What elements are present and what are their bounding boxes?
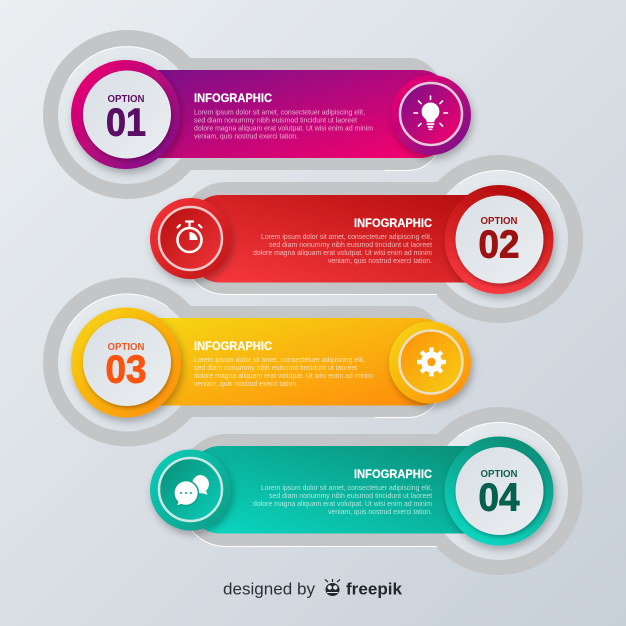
body text: sed diam nonummy nibh euismod tincidunt ut laoreet xyxy=(269,240,432,249)
body text: veniam, quis nostrud exerci tation. xyxy=(328,256,432,265)
body text: Lorem ipsum dolor sit amet, consectetuer adipiscing elit, xyxy=(261,483,432,492)
panel: option 02 xyxy=(150,155,583,323)
option badge xyxy=(444,185,554,294)
icon: light bulb xyxy=(391,75,471,155)
body text: dolore magna aliquam erat volutpat. Ut wisi enim ad minim xyxy=(194,371,373,380)
body text xyxy=(194,355,373,388)
option badge xyxy=(71,308,181,418)
heading: INFOGRAPHIC xyxy=(194,93,272,105)
body text xyxy=(253,232,432,265)
body text: dolore magna aliquam erat volutpat. Ut wisi enim ad minim xyxy=(253,499,432,508)
body text: dolore magna aliquam erat volutpat. Ut wisi enim ad minim xyxy=(194,123,373,132)
panel: option 04 xyxy=(150,407,583,575)
option badge: 02 xyxy=(478,224,520,266)
option badge: OPTION xyxy=(480,468,518,480)
heading: INFOGRAPHIC xyxy=(354,218,432,230)
body text: veniam, quis nostrud exerci tation. xyxy=(194,131,298,140)
body text: sed diam nonummy nibh euismod tincidunt ut laoreet xyxy=(194,363,357,372)
body text: Lorem ipsum dolor sit amet, consectetuer adipiscing elit, xyxy=(194,355,365,364)
icon: gear xyxy=(389,322,471,404)
body text: veniam, quis nostrud exerci tation. xyxy=(328,507,432,516)
body text: Lorem ipsum dolor sit amet, consectetuer adipiscing elit, xyxy=(194,107,365,116)
credit text: designed by xyxy=(223,580,316,598)
brand name: freepik xyxy=(346,580,403,598)
option badge: 03 xyxy=(106,349,146,392)
heading: INFOGRAPHIC xyxy=(354,469,432,481)
grey backing shape xyxy=(190,407,583,575)
body text: veniam, quis nostrud exerci tation. xyxy=(194,379,298,388)
icon: freepik bee xyxy=(325,579,340,596)
option badge: 04 xyxy=(478,477,520,520)
panel: option 01 xyxy=(43,30,471,199)
grey backing shape xyxy=(43,278,438,446)
option badge xyxy=(444,436,554,546)
body text: sed diam nonummy nibh euismod tincidunt ut laoreet xyxy=(269,491,432,500)
icon: chat bubbles xyxy=(150,450,231,530)
option badge: 01 xyxy=(106,102,146,144)
colour bar xyxy=(130,318,450,406)
option badge: OPTION xyxy=(480,215,518,227)
grey backing shape xyxy=(190,155,583,323)
grey backing shape xyxy=(43,30,438,199)
panel: option 03 xyxy=(43,278,471,446)
option badge: OPTION xyxy=(108,341,144,353)
body text xyxy=(194,107,373,140)
body text: dolore magna aliquam erat volutpat. Ut wisi enim ad minim xyxy=(253,248,432,257)
option badge xyxy=(71,60,180,169)
icon: stopwatch xyxy=(150,198,231,279)
colour bar xyxy=(190,195,500,282)
body text: sed diam nonummy nibh euismod tincidunt ut laoreet xyxy=(194,115,357,124)
footer: freepik credit xyxy=(223,579,403,598)
colour bar xyxy=(190,446,500,534)
body text: Lorem ipsum dolor sit amet, consectetuer adipiscing elit, xyxy=(261,232,432,241)
heading: INFOGRAPHIC xyxy=(194,341,272,353)
body text xyxy=(253,483,432,516)
colour bar xyxy=(130,70,450,158)
option badge: OPTION xyxy=(108,93,144,105)
